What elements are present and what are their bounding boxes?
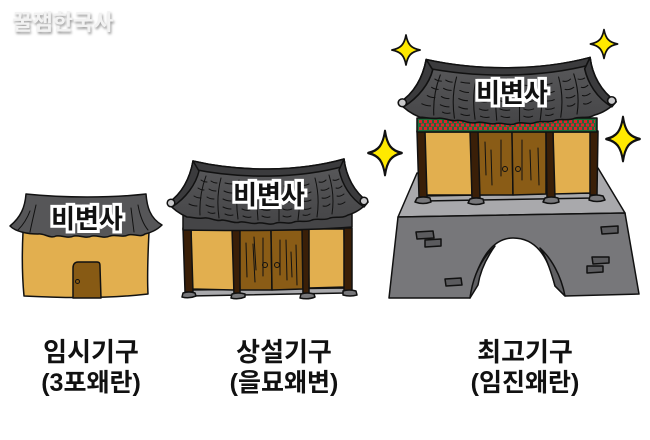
house roof: [10, 194, 162, 237]
under-roof band: [183, 206, 352, 231]
caption: standing agency: (을묘왜변): [230, 369, 338, 397]
hall walls: [191, 229, 345, 290]
arch inner shadow: [470, 246, 565, 298]
hall doors: [238, 230, 303, 290]
hall pillars: [183, 228, 352, 295]
pavilion walls: [424, 132, 592, 195]
caption: standing agency: [230, 337, 338, 397]
house wall: [22, 232, 149, 298]
sign: 비변사: 비변사: [233, 180, 305, 210]
caption: supreme agency: [471, 337, 579, 397]
watermark logo: 꿀잼한국사: [12, 10, 114, 35]
stone gate wall: [389, 213, 639, 298]
caption: temporary agency: [41, 337, 141, 397]
building: temporary small house: [10, 194, 162, 298]
sign: 비변사: 비변사: [51, 204, 123, 234]
house door: [73, 262, 101, 298]
caption: supreme agency: 최고기구: [477, 337, 573, 367]
watermark logo: 꿀잼한국사: [13, 12, 115, 37]
bricks: [416, 226, 618, 286]
pavilion base strip: [424, 193, 594, 201]
pillar stones: [182, 290, 357, 299]
building: fortress gate pavilion: [389, 57, 639, 298]
dancheong painted band: [417, 118, 597, 132]
caption: standing agency: 상설기구: [236, 337, 332, 367]
upper platform: [398, 168, 625, 217]
caption: supreme agency: (임진왜란): [471, 369, 579, 397]
sign: 비변사: 비변사: [476, 78, 548, 108]
base strip: [190, 288, 346, 296]
pavilion pillars: [417, 131, 598, 198]
hall roof: [167, 159, 368, 224]
pavilion doors: [477, 132, 546, 195]
pavilion stones: [415, 195, 605, 204]
building: standing hall: [167, 159, 368, 299]
sparkle stars: [368, 30, 640, 175]
pavilion roof: [398, 57, 616, 125]
caption: temporary agency: (3포왜란): [41, 369, 141, 397]
caption: temporary agency: 임시기구: [43, 337, 139, 367]
